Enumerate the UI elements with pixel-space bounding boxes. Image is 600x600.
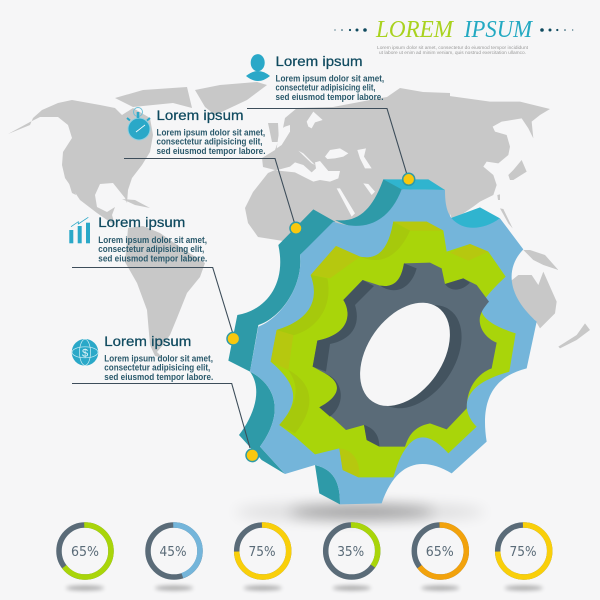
gear [228,179,537,504]
donut 1: 65%: 65% [71,545,99,560]
text block 2: Lorem ipsum dolor sit amet, [156,128,265,138]
text block 4 [104,333,213,382]
text block 1 [276,53,384,102]
text block 3: consectetur adipisicing elit, [98,244,204,254]
text block 1: Lorem ipsum dolor sit amet, [276,74,384,84]
donut 4: 35%: 35% [337,545,364,560]
donut 3: 75%: 75% [248,545,276,560]
donut 4: 35% [326,525,378,590]
title: Lorem ipsum dolor sit amet, consectetur do eiusmod tempor incididunt [377,45,529,50]
world map [8,82,590,358]
callout markers [227,173,415,462]
title: IPSUM [463,17,534,43]
text block 3 [98,214,207,264]
map seas [276,112,375,217]
title dots [334,28,573,32]
text block 3: sed eiusmod tempor labore. [98,254,207,264]
icon: person [246,54,270,81]
text block 2 [156,107,266,156]
donut 5: 65%: 65% [426,545,454,560]
dark gear side [313,263,497,447]
donut 6: 75% [498,525,550,590]
text block 2: consectetur adipisicing elit, [156,137,262,147]
icon: stopwatch [127,108,150,140]
donut 2: 45% [148,525,200,590]
title: ut labore ut enim ad minim veniam, quis nostrud exercitation ullamco. [379,50,526,55]
text block 4: consectetur adipisicing elit, [104,363,210,373]
green gear shading [271,222,488,477]
text block 1: consectetur adipisicing elit, [276,83,376,93]
title: LOREM [375,17,455,43]
text block 3: Lorem ipsum dolor sit amet, [98,235,207,245]
text block 4: Lorem ipsum dolor sit amet, [104,354,213,364]
text block 2: sed eiusmod tempor labore. [156,146,266,156]
donut 5: 65% [414,525,466,590]
outer gear side [228,179,500,504]
dark gear shading [313,263,470,447]
text block 1: sed eiusmod tempor labore. [276,92,384,102]
title [375,17,534,55]
text block 1: Lorem ipsum [276,53,362,69]
text block 3: Lorem ipsum [98,214,185,230]
text block 4: sed eiusmod tempor labore. [104,372,213,382]
donut 3: 75% [237,525,289,590]
callout lines [72,108,408,448]
text block 2: Lorem ipsum [156,107,244,123]
text block 4: Lorem ipsum [104,333,191,349]
icon: globe with dollar [72,339,98,366]
donut 1: 65% [59,525,111,590]
icon: globe with dollar: $ [82,348,88,360]
outer gear face [250,189,537,504]
donut 2: 45%: 45% [160,545,186,560]
donut 6: 75%: 75% [510,545,536,560]
icon: bar chart [69,217,90,243]
green gear side [271,222,516,477]
gear hole [342,286,480,425]
gear shadow [235,503,485,521]
